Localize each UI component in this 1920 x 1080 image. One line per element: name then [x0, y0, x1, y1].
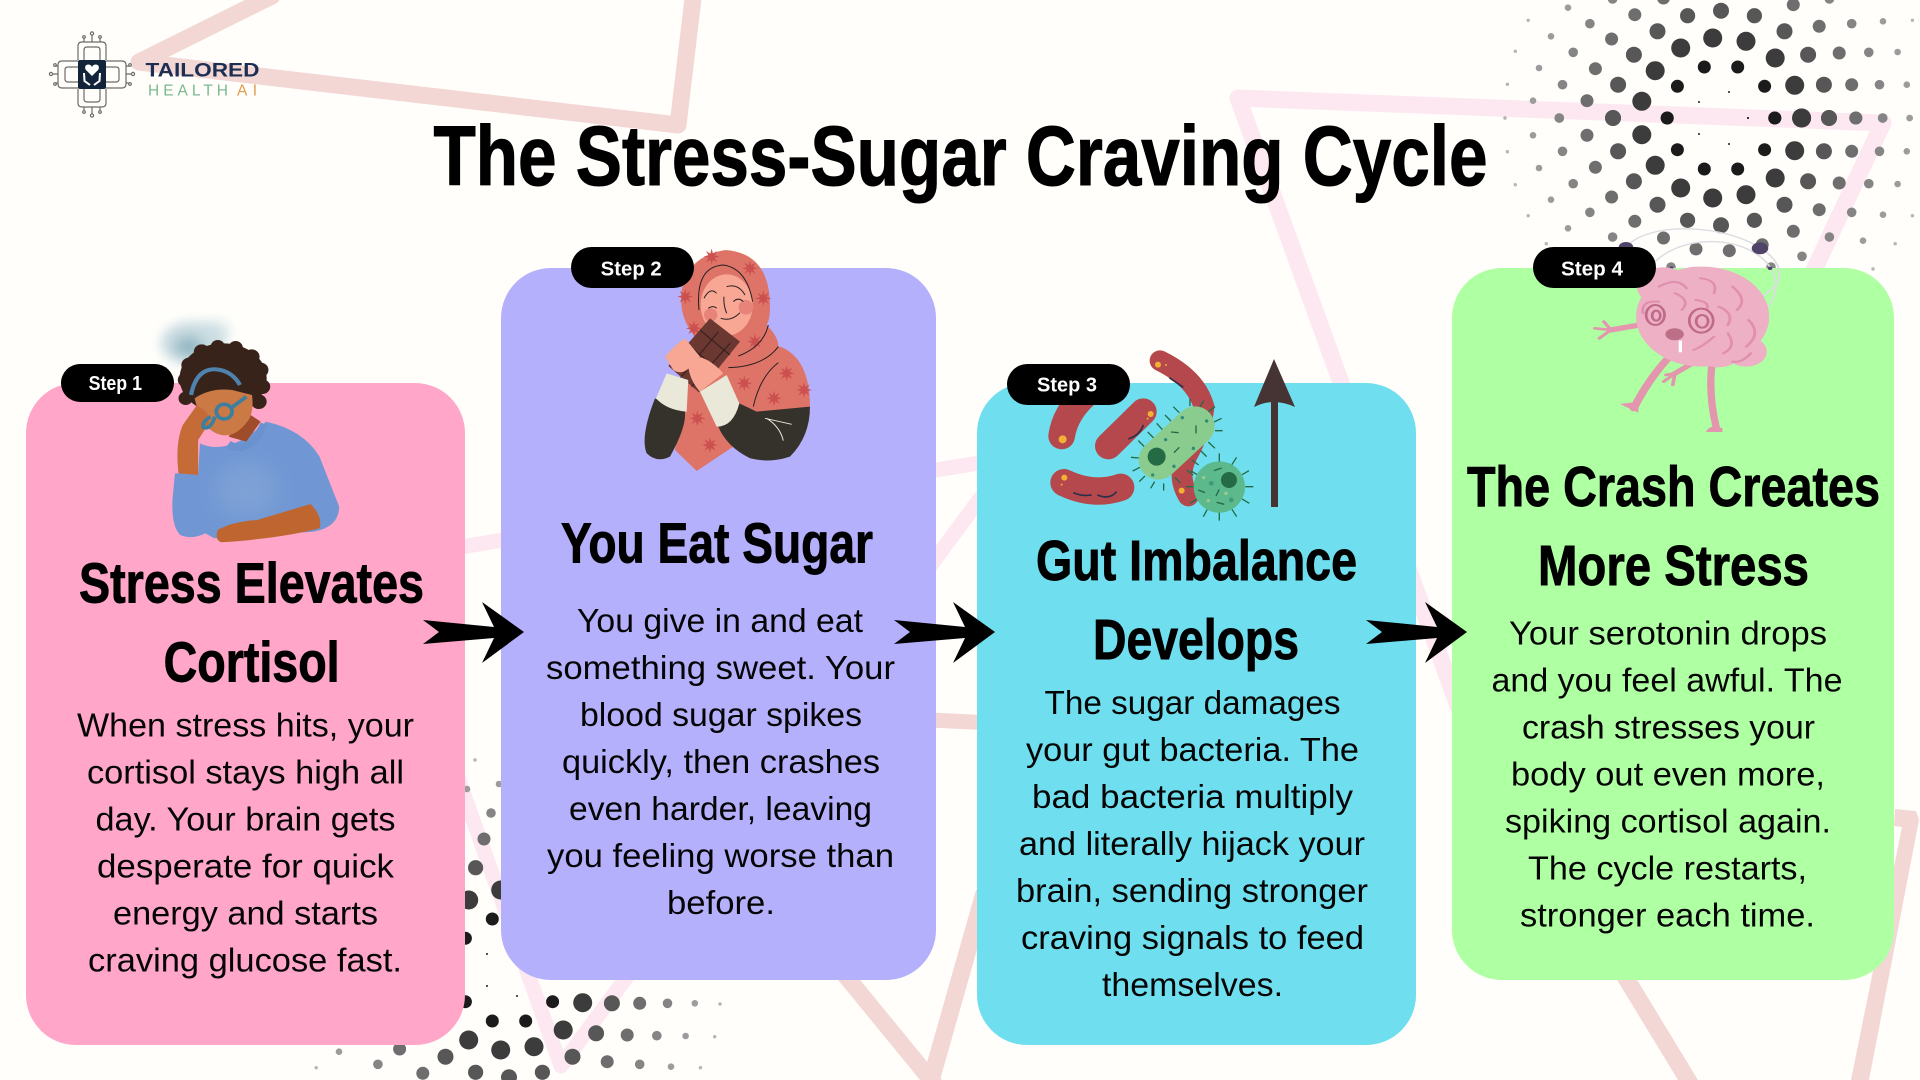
text block: step 2: blood sugar spikes — [580, 696, 862, 733]
logo text: TAILORED — [146, 61, 260, 82]
step 2 badge: Step 2 — [601, 259, 662, 281]
arrow: step 3 to step 4 — [1366, 602, 1467, 663]
text block: step 3: craving signals to feed — [1021, 919, 1364, 956]
icon: dizzy brain — [1595, 219, 1789, 432]
heading: step 3: Develops — [1093, 608, 1299, 672]
text block: step 2: quickly, then crashes — [562, 743, 880, 780]
icon: gut bacteria — [1059, 361, 1253, 521]
text block: step 3: and literally hijack your — [1019, 825, 1365, 862]
text block: step 3: The sugar damages — [1044, 684, 1340, 721]
text block: step 2: you feeling worse than — [547, 837, 894, 874]
arrow: step 2 to step 3 — [894, 602, 995, 663]
text block: step 3: brain, sending stronger — [1016, 872, 1368, 909]
text block: step 4: The cycle restarts, — [1528, 850, 1807, 886]
logo icon — [49, 32, 135, 117]
panel: step 4 card — [1452, 268, 1894, 980]
icon: woman eating chocolate — [645, 249, 812, 471]
panel: step 1 card — [26, 383, 465, 1045]
logo: HEALTH — [148, 83, 228, 100]
text block: step 1: When stress hits, your — [77, 707, 414, 744]
step 2 badge — [571, 247, 694, 288]
panel: step 2 card — [501, 268, 936, 980]
text block: step 4: Your serotonin drops — [1509, 614, 1827, 652]
arrow: step 1 to step 2 — [423, 602, 524, 663]
logo — [49, 32, 260, 117]
step 3 badge: Step 3 — [1037, 375, 1097, 397]
text block: step 3: themselves. — [1102, 966, 1283, 1003]
icon: stressed woman — [161, 320, 339, 542]
logo: AI — [237, 83, 257, 100]
icon: rising arrow — [1254, 359, 1295, 507]
text block: step 4: spiking cortisol again. — [1505, 802, 1831, 840]
text block: step 3: bad bacteria multiply — [1032, 778, 1354, 815]
text block: step 1: energy and starts — [113, 895, 378, 932]
text block: step 1: craving glucose fast. — [88, 942, 402, 979]
heading: step 4: More Stress — [1538, 534, 1809, 598]
heading: step 1: Cortisol — [164, 631, 340, 695]
text block: step 2: before. — [667, 884, 775, 921]
step 4 badge — [1533, 247, 1656, 288]
heading: step 1: Stress Elevates — [79, 552, 424, 616]
text block: step 1: cortisol stays high all — [87, 754, 404, 791]
text block: step 4: and you feel awful. The — [1492, 662, 1842, 698]
step 3 badge — [1007, 364, 1130, 405]
text block: step 4: stronger each time. — [1520, 896, 1815, 934]
heading: step 3: Gut Imbalance — [1036, 529, 1357, 593]
text block: step 4 — [1492, 614, 1842, 934]
text block: step 2: something sweet. Your — [546, 649, 895, 686]
text block: step 3 — [1016, 684, 1368, 1003]
text block: step 1: day. Your brain gets — [96, 801, 396, 838]
halftone dots: top right — [1503, 0, 1920, 330]
heading: step 4 — [1467, 455, 1880, 598]
text block: step 1: desperate for quick — [97, 848, 395, 885]
step 1 badge: Step 1 — [89, 373, 142, 395]
heading: step 2: You Eat Sugar — [561, 512, 873, 576]
halftone dots: bottom left — [291, 758, 727, 1080]
heading: step 3 — [1036, 529, 1357, 672]
text block: step 2: You give in and eat — [577, 602, 863, 639]
text block: step 3: your gut bacteria. The — [1026, 731, 1359, 768]
step 1 badge — [61, 364, 174, 402]
step 4 badge: Step 4 — [1561, 259, 1624, 281]
heading: step 1 — [79, 552, 424, 695]
text block: step 2 — [546, 602, 895, 921]
text block: step 2: even harder, leaving — [569, 790, 872, 827]
text block: step 1 — [77, 707, 414, 979]
panel: step 3 card — [977, 383, 1416, 1045]
text block: step 4: body out even more, — [1511, 756, 1825, 792]
title: The Stress-Sugar Craving Cycle — [434, 109, 1488, 203]
text block: step 4: crash stresses your — [1522, 708, 1815, 746]
